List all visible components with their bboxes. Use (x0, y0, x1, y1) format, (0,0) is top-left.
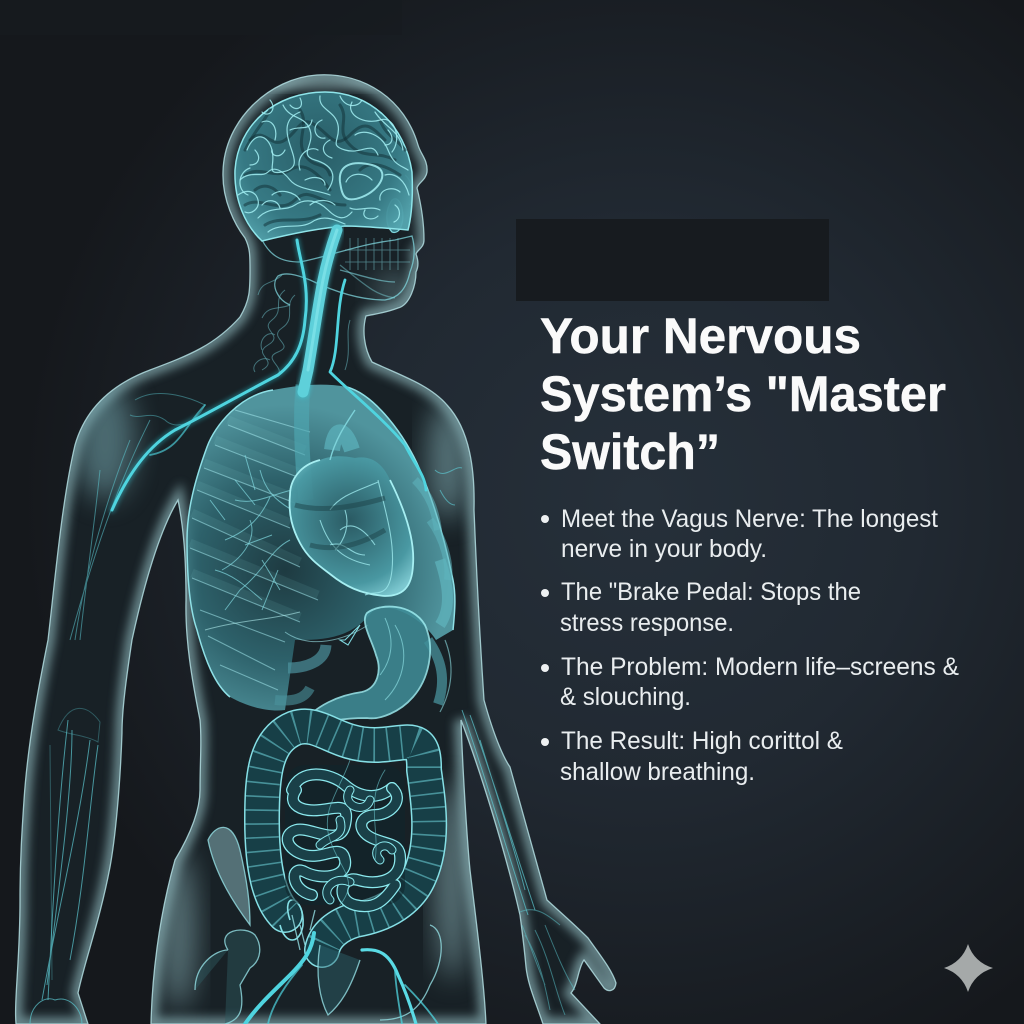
bullet: brake pedal: The "Brake Pedal: Stops the (561, 578, 861, 606)
cervical spine (254, 275, 350, 378)
small intestine (285, 760, 405, 906)
bullet: vagus nerve: nerve in your body. (561, 535, 767, 563)
bullet: brake pedal (541, 578, 861, 637)
dark title placeholder block (516, 219, 829, 301)
right branch (330, 280, 426, 490)
bullet: vagus nerve (541, 505, 938, 563)
pelvic branches (245, 933, 438, 1024)
stomach (300, 607, 430, 732)
bullet: the problem: The Problem: Modern life–screens & (561, 653, 959, 681)
skull and jaw (262, 175, 414, 305)
esophagus tube (302, 385, 352, 500)
icon: sparkle watermark (944, 944, 993, 992)
large intestine (262, 726, 429, 950)
heading: System’s "Master (540, 366, 946, 422)
lung bronchi (210, 455, 292, 610)
heading: Switch” (540, 424, 720, 480)
bullet: brake pedal: stress response. (560, 609, 734, 637)
heart (290, 410, 413, 596)
body silhouette (16, 75, 616, 1024)
bullet: the problem: & slouching. (560, 683, 691, 711)
rib bands (190, 420, 318, 617)
heading: Your Nervous (540, 308, 861, 364)
bullet: vagus nerve: Meet the Vagus Nerve: The longest (561, 505, 938, 533)
lower rib bands (205, 480, 451, 712)
brain (235, 92, 412, 241)
bullet list (541, 505, 959, 786)
bullet: the result: shallow breathing. (560, 758, 755, 786)
arm bones and nerves (30, 394, 575, 1024)
heading (540, 308, 946, 480)
main trunk (303, 230, 337, 392)
left branch (112, 240, 306, 510)
vagus nerve (112, 230, 438, 1024)
bullet: the result (541, 727, 843, 786)
bullet: the result: The Result: High corittol & (561, 727, 843, 755)
heart ribs (295, 498, 385, 548)
ribcage and lungs (187, 385, 455, 712)
pelvis and lower organs (195, 827, 441, 1024)
human body figure (16, 75, 616, 1024)
bullet: the problem (541, 653, 959, 711)
